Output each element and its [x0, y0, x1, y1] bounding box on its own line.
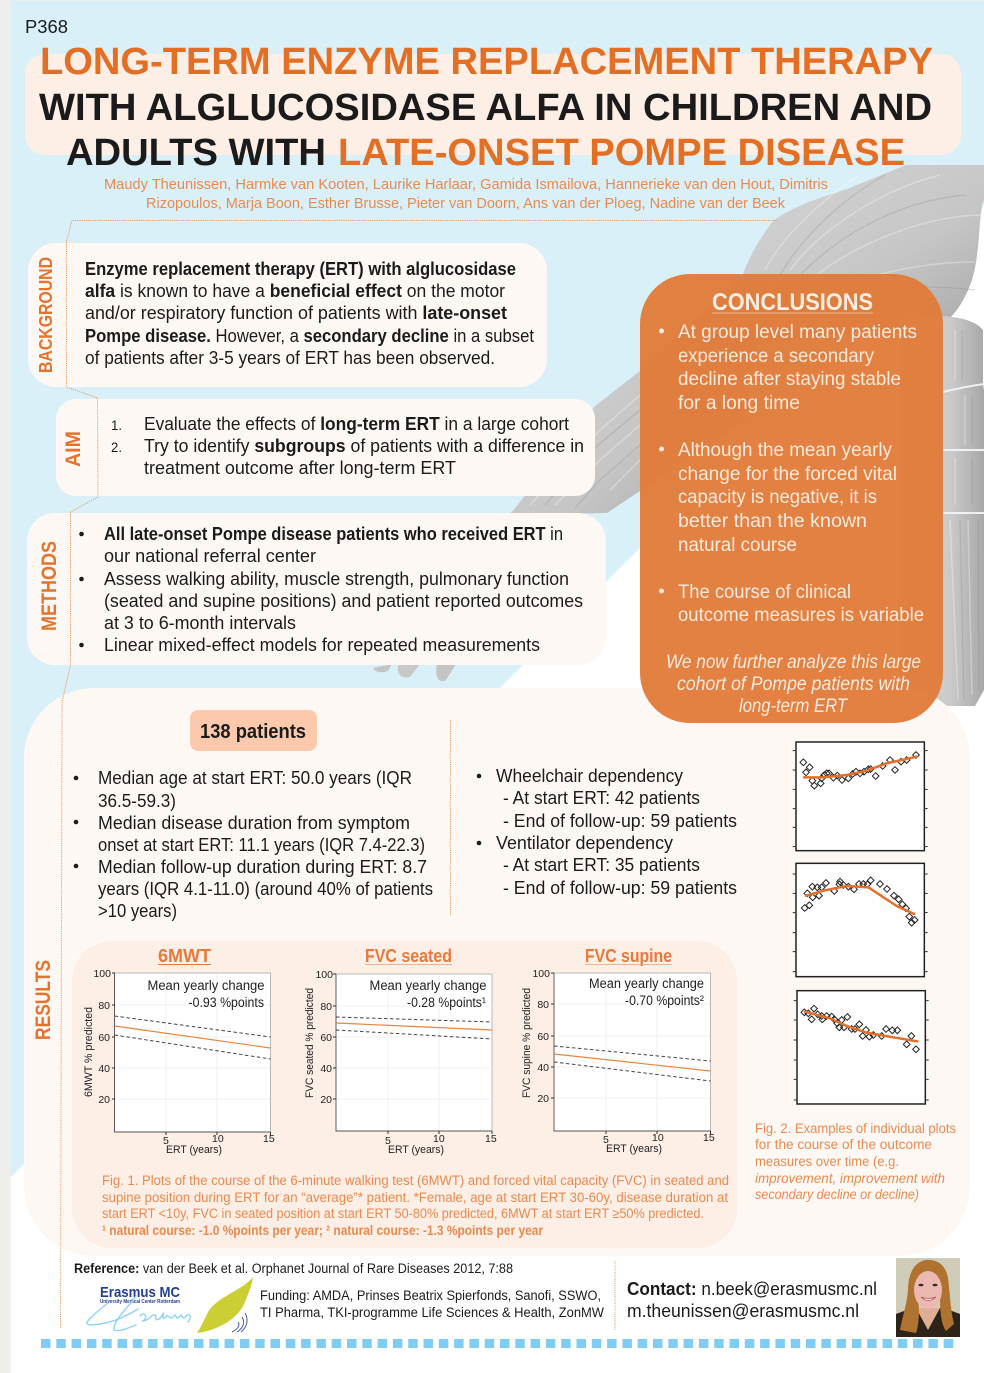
- text: methods list: Assess walking ability, muscle strength, pulmonary function: [104, 569, 569, 589]
- reference: Reference: van der Beek et al. Orphanet Journal of Rare Diseases 2012, 7:88: [74, 1261, 513, 1276]
- text: aim list: treatment outcome after long-term ERT: [144, 458, 456, 478]
- title banner: LATE-ONSET POMPE DISEASE: [338, 132, 905, 174]
- chart: 6MWT: [83, 946, 275, 1156]
- title banner: LONG-TERM ENZYME REPLACEMENT THERAPY: [40, 41, 933, 83]
- chart: 6MWT: ERT (years): [166, 1144, 222, 1156]
- text: patient characteristics: onset at start ERT: 11.1 years (IQR 7.4-22.3): [98, 835, 425, 855]
- chart: FVC seated: FVC seated: [365, 946, 452, 966]
- text: conclusion bullets: better than the known: [678, 511, 867, 532]
- heading: conclusions: CONCLUSIONS: [712, 289, 873, 316]
- text: dependency statistics: [477, 766, 737, 898]
- text: dependency statistics: - End of follow-up: 59 patients: [503, 878, 737, 898]
- authors: [104, 177, 828, 212]
- panel: conclusions: [640, 274, 943, 723]
- figure 2: individual plots: [793, 742, 929, 1104]
- text: methods list: at 3 to 6-month intervals: [104, 613, 296, 633]
- poster number: P368: [25, 17, 68, 37]
- panel: background: [28, 243, 547, 387]
- text: conclusion bullets: for a long time: [678, 393, 800, 414]
- text: patient characteristics: Median age at start ERT: 50.0 years (IQR: [98, 768, 412, 788]
- authors: Maudy Theunissen, Harmke van Kooten, Laurike Harlaar, Gamida Ismailova, Hannerieke van den Hout, Dimitris: [104, 177, 828, 193]
- chart: 6MWT: 40: [98, 1063, 110, 1075]
- text: conclusion outlook: cohort of Pompe patients with: [677, 674, 910, 695]
- chart: FVC seated: FVC seated % predicted: [304, 988, 316, 1098]
- caption: figure 2: measures over time (e.g.: [755, 1154, 899, 1169]
- panel: aim: [56, 399, 595, 496]
- plot: improvement: [793, 742, 928, 851]
- text: patient characteristics: >10 years): [98, 901, 177, 921]
- chart: FVC supine: ERT (years): [606, 1143, 662, 1155]
- chart: FVC supine: 60: [537, 1031, 549, 1043]
- caption: figure 1: [102, 1173, 729, 1238]
- chart: FVC seated: 20: [320, 1094, 332, 1106]
- text: conclusion bullets: change for the forced vital: [678, 464, 897, 485]
- text: patient characteristics: [74, 768, 433, 921]
- panel: methods: [27, 513, 606, 665]
- text: patient characteristics: years (IQR 4.1-11.0) (around 40% of patients: [98, 879, 433, 899]
- caption: figure 1: start ERT <10y, FVC in seated position at start ERT 50-80% predicted, 6MWT at start ERT ≥50% predicted.: [102, 1206, 704, 1221]
- chart: FVC seated: ERT (years): [388, 1144, 444, 1156]
- chart: FVC seated: 15: [485, 1133, 497, 1145]
- chart: 6MWT: 100: [93, 968, 111, 980]
- chart: 6MWT: Mean yearly change: [148, 978, 264, 993]
- chart: FVC seated: [304, 946, 497, 1156]
- contact: Contact: n.beek@erasmusmc.nl: [627, 1279, 877, 1299]
- chart: FVC supine: 80: [537, 999, 549, 1011]
- chart: 6MWT: 20: [98, 1094, 110, 1106]
- caption: figure 2: secondary decline or decline): [755, 1187, 919, 1202]
- contact: m.theunissen@erasmusmc.nl: [627, 1301, 859, 1321]
- chart: FVC seated: 5: [385, 1135, 391, 1147]
- text: conclusion bullets: Although the mean yearly: [678, 440, 892, 461]
- authors: Rizopoulos, Marja Boon, Esther Brusse, Pieter van Doorn, Ans van der Ploeg, Nadine van der Beek: [146, 196, 786, 212]
- text: methods list: All late-onset Pompe disease patients who received ERT in: [104, 524, 563, 544]
- text: conclusion bullets: natural course: [678, 535, 797, 556]
- caption: figure 2: for the course of the outcome: [755, 1137, 932, 1152]
- heading: aim: AIM: [62, 431, 85, 467]
- text: methods list: (seated and supine positions) and patient reported outcomes: [104, 591, 583, 611]
- text: aim list: Try to identify subgroups of patients with a difference in: [144, 436, 584, 456]
- badge: 138 patients: [190, 710, 317, 751]
- text: dependency statistics: Wheelchair dependency: [496, 766, 683, 786]
- title banner: [25, 41, 961, 174]
- title banner: WITH ALGLUCOSIDASE ALFA IN CHILDREN AND: [39, 87, 932, 129]
- text: conclusion outlook: We now further analyze this large: [666, 652, 921, 673]
- logo: Erasmus MC: University Medical Center Rotterdam: [100, 1299, 181, 1305]
- chart: FVC supine: -0.70 %points²: [625, 993, 704, 1008]
- chart: FVC supine: 40: [537, 1062, 549, 1074]
- caption: figure 2: Fig. 2. Examples of individual plots: [755, 1121, 956, 1136]
- chart: 6MWT: 60: [98, 1032, 110, 1044]
- caption: figure 1: supine position during ERT for an “average”* patient. *Female, age at start ERT 30-60y, disease duration at: [102, 1190, 728, 1205]
- chart: 6MWT: 6MWT % predicted: [83, 1007, 95, 1097]
- caption: figure 1: Fig. 1. Plots of the course of the 6-minute walking test (6MWT) and forced vital capacity (FVC) in seated and: [102, 1173, 729, 1188]
- chart: FVC supine: 5: [603, 1134, 609, 1146]
- caption: figure 2: improvement, improvement with: [755, 1171, 945, 1186]
- logo: Erasmus MC: Erasmus MC: [100, 1284, 180, 1301]
- text: dependency statistics: - At start ERT: 35 patients: [503, 855, 700, 875]
- text: background: Enzyme replacement therapy (ERT) with alglucosidase: [85, 259, 516, 279]
- chart: FVC seated: 10: [433, 1133, 445, 1145]
- photo: portrait: [896, 1258, 960, 1337]
- text: aim list: 1.: [111, 417, 122, 433]
- text: conclusion bullets: capacity is negative, it is: [678, 487, 877, 508]
- text: methods list: our national referral center: [104, 546, 316, 566]
- chart: 6MWT: 80: [98, 1000, 110, 1012]
- chart: FVC supine: FVC supine: [585, 946, 672, 966]
- chart: 6MWT: 5: [163, 1135, 169, 1147]
- text: patient characteristics: 36.5-59.3): [98, 791, 176, 811]
- text: dependency statistics: - End of follow-up: 59 patients: [503, 811, 737, 831]
- text: conclusion bullets: decline after staying stable: [678, 369, 901, 390]
- text: conclusion bullets: outcome measures is variable: [678, 605, 924, 626]
- text: methods list: [79, 524, 583, 655]
- heading: methods: METHODS: [38, 541, 61, 631]
- text: methods list: Linear mixed-effect models for repeated measurements: [104, 635, 540, 655]
- chart: 6MWT: -0.93 %points: [188, 995, 264, 1010]
- chart: FVC seated: 40: [320, 1063, 332, 1075]
- chart: FVC seated: 80: [320, 1001, 332, 1013]
- chart: FVC seated: -0.28 %points¹: [407, 995, 486, 1010]
- caption: figure 2: [755, 1121, 956, 1202]
- chart: FVC supine: 10: [652, 1132, 664, 1144]
- heading: results: RESULTS: [32, 960, 55, 1040]
- chart: FVC seated: Mean yearly change: [370, 978, 486, 993]
- chart: 6MWT: 10: [212, 1133, 224, 1145]
- connector: dotted section line: [60, 220, 778, 1328]
- logo: Erasmus MC: [87, 1284, 190, 1331]
- text: conclusion bullets: [659, 322, 924, 626]
- plot: improvement with secondary decline: [793, 863, 928, 977]
- text: aim list: Evaluate the effects of long-term ERT in a large cohort: [144, 414, 569, 434]
- logo: leaf: [197, 1277, 253, 1333]
- chart: FVC supine: 15: [703, 1132, 715, 1144]
- chart: FVC seated: 100: [315, 969, 333, 981]
- chart: FVC supine: [521, 946, 715, 1155]
- text: conclusion bullets: The course of clinical: [678, 582, 851, 603]
- text: conclusion outlook: long-term ERT: [739, 696, 848, 717]
- funding: TI Pharma, TKI-programme Life Sciences & Health, ZonMW: [260, 1305, 604, 1320]
- text: aim list: 2.: [111, 439, 122, 455]
- text: background: alfa is known to have a beneficial effect on the motor: [85, 281, 505, 301]
- heading: background: BACKGROUND: [36, 257, 56, 373]
- divider: dashed blue bar: [41, 1339, 957, 1348]
- text: dependency statistics: - At start ERT: 42 patients: [503, 788, 700, 808]
- illustration: grey muscle anatomy figure: [373, 165, 984, 706]
- text: conclusion outlook: [666, 652, 921, 717]
- chart: 6MWT: 15: [263, 1133, 275, 1145]
- contact: [627, 1279, 877, 1321]
- text: background: and/or respiratory function of patients with late-onset: [85, 303, 507, 323]
- text: dependency statistics: Ventilator dependency: [496, 833, 673, 853]
- plot: decline: [794, 991, 929, 1104]
- chart: 6MWT: 6MWT: [158, 946, 211, 966]
- panel: results background: [24, 688, 970, 1256]
- text: aim list: [111, 414, 584, 478]
- text: background: Pompe disease. However, a secondary decline in a subset: [85, 326, 534, 346]
- title banner: ADULTS WITH: [66, 132, 326, 174]
- text: patient characteristics: Median follow-up duration during ERT: 8.7: [98, 857, 427, 877]
- chart: FVC supine: Mean yearly change: [589, 976, 704, 991]
- text: background: [85, 259, 534, 368]
- funding: [260, 1288, 604, 1320]
- funding: Funding: AMDA, Prinses Beatrix Spierfonds, Sanofi, SSWO,: [260, 1288, 601, 1303]
- chart: FVC seated: 60: [320, 1032, 332, 1044]
- text: conclusion bullets: experience a secondary: [678, 346, 874, 367]
- text: patient characteristics: Median disease duration from symptom: [98, 813, 410, 833]
- caption: figure 1: ¹ natural course: -1.0 %points per year; ² natural course: -1.3 %points per year: [102, 1223, 544, 1238]
- chart: FVC supine: 100: [532, 968, 550, 980]
- text: background: of patients after 3-5 years of ERT has been observed.: [85, 348, 495, 368]
- text: conclusion bullets: At group level many patients: [678, 322, 917, 343]
- panel: figure 1 charts: [72, 941, 737, 1248]
- chart: FVC supine: 20: [537, 1093, 549, 1105]
- badge: 138 patients: 138 patients: [200, 721, 306, 743]
- chart: FVC supine: FVC supine % predicted: [521, 988, 533, 1098]
